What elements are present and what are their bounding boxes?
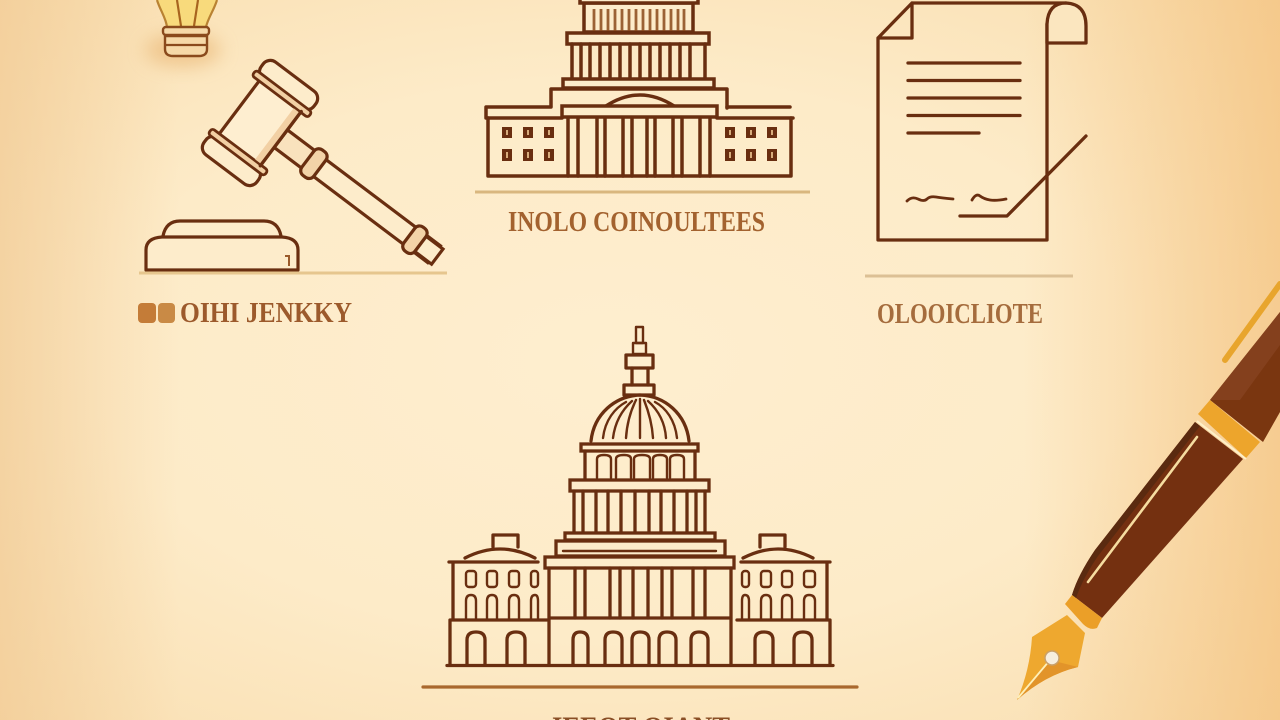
text lines [908,63,1020,133]
lower ring [1065,595,1102,629]
capitol baseline [475,190,810,194]
upper colonnade [563,33,714,88]
ground line [447,664,833,667]
document baseline [865,274,1073,278]
upper drum [580,0,698,32]
gavel hammer [197,56,472,303]
pen clip [1225,284,1280,360]
scroll curl [1047,3,1086,43]
page [878,3,1066,240]
icon: fountain pen [1017,284,1280,700]
barrel highlight [1088,437,1197,582]
sound block [146,221,298,270]
gavel baseline [139,272,447,274]
signing stroke [960,136,1086,216]
central block and pediment [551,89,727,117]
left wing [449,535,547,665]
dome spire [624,327,654,395]
nib [1017,615,1085,700]
icon: light bulb [145,0,221,67]
signature [907,195,1006,201]
label: document: OLOOICLIOTE [877,299,1043,330]
icon: signed document [865,3,1086,276]
icon: gavel [139,56,472,303]
pen barrel [1072,422,1243,618]
dome drum [585,451,695,479]
central portico [549,568,731,665]
label: gavel: OIHI JENKKY [180,298,352,329]
pen cap [1210,312,1280,442]
wings [486,107,793,176]
windows [502,127,777,161]
nib hole [1045,651,1059,665]
label: upper capitol: INOLO COINOULTEES [508,207,765,238]
capitol baseline [423,685,857,689]
dome [581,395,698,451]
gold band [1198,400,1260,458]
right wing [737,535,830,665]
dome colonnade [545,480,734,568]
icon: capitol building, upper [475,0,810,192]
icon: capitol building, large [423,327,857,687]
